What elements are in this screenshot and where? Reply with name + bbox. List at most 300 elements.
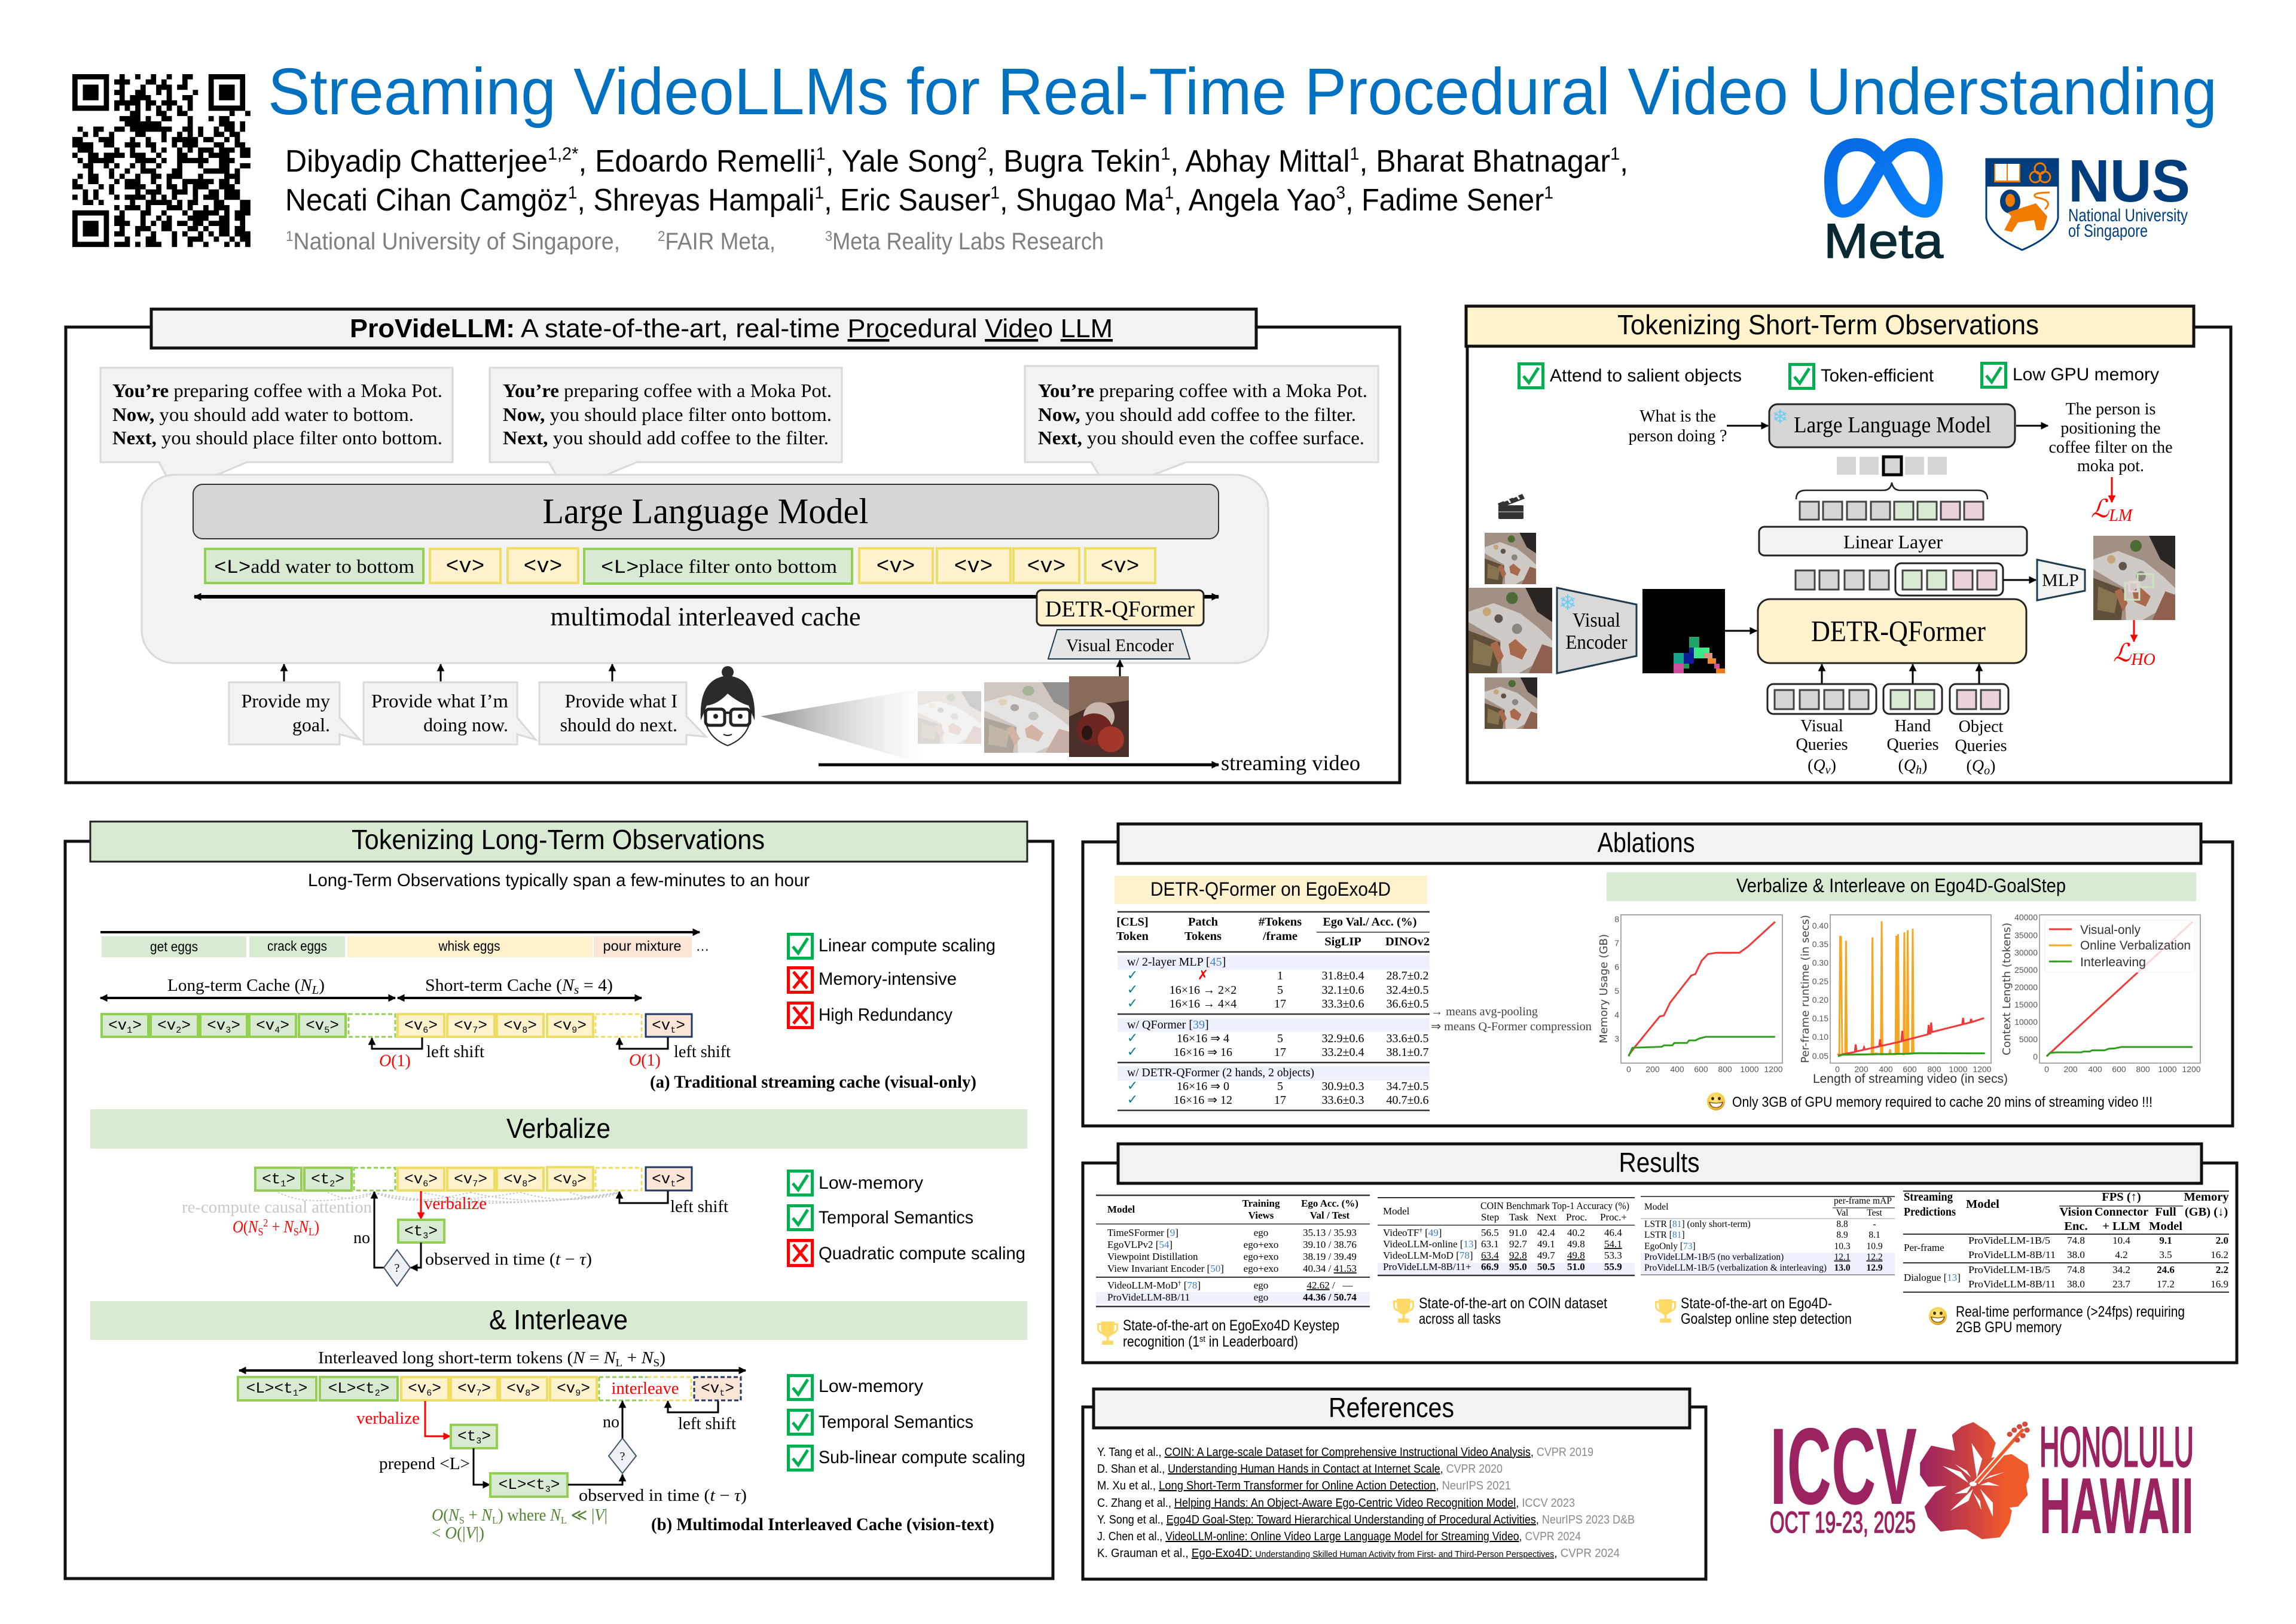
affiliations: 3 xyxy=(825,228,832,245)
visual-only token row: t xyxy=(670,1025,676,1036)
authors: 1 xyxy=(816,144,826,164)
interleaved token row: > xyxy=(581,1379,590,1397)
chart: context length: 0 xyxy=(2033,1052,2038,1061)
interleaved label and span: ) xyxy=(660,1349,665,1367)
table: streaming performance: 2.2 xyxy=(2216,1264,2228,1275)
complexity note: N xyxy=(549,1506,561,1525)
LLM output bubbles: You’re preparing coffee with a Moka Pot. xyxy=(1038,380,1367,401)
table: Ego4D Goalstep: LSTR [81] xyxy=(1644,1230,1685,1240)
interleaved token row: 8 xyxy=(525,1388,530,1399)
visual-only token row: > xyxy=(280,1016,289,1034)
authors: 1 xyxy=(815,183,824,203)
reference list xyxy=(1097,1446,1635,1560)
checklist verbalize: Low-memory xyxy=(819,1173,923,1193)
token cache row: <v> xyxy=(446,554,484,579)
callout: COIN xyxy=(1393,1295,1607,1327)
table: DETR-QFormer ablation: ✓ xyxy=(1127,996,1138,1011)
table: COIN: 51.0 xyxy=(1567,1261,1585,1272)
table: EgoExo4D: Views xyxy=(1248,1210,1274,1221)
table: DETR-QFormer ablation: w/ 2-layer MLP [45] xyxy=(1127,956,1226,969)
chart: context length: 35000 xyxy=(2014,930,2038,940)
affiliations: Meta Reality Labs Research xyxy=(832,228,1104,255)
query labels: Queries xyxy=(1796,735,1848,754)
table: DETR-QFormer ablation: 31.8±0.4 xyxy=(1322,969,1364,982)
table: streaming performance: Model xyxy=(2149,1220,2182,1233)
answer text: positioning the xyxy=(2060,419,2161,438)
LM loss: LM xyxy=(2108,506,2133,525)
table: streaming performance: 9.1 xyxy=(2159,1235,2172,1246)
chart: memory usage: 5 xyxy=(1614,986,1619,996)
chart: memory usage: 1000 xyxy=(1740,1064,1759,1074)
panel: Ablations xyxy=(1083,824,2233,1126)
authors: 1 xyxy=(1349,144,1359,164)
table notes: → means avg-pooling xyxy=(1431,1005,1538,1018)
interleaved token row: > xyxy=(530,1379,540,1397)
field-of-view cone xyxy=(761,688,924,764)
chart: per-frame runtime xyxy=(1799,915,1992,1074)
authors: , Angela Yao xyxy=(1174,183,1336,218)
table: COIN: 40.2 xyxy=(1567,1227,1585,1238)
token cache row xyxy=(205,548,1155,584)
chart: per-frame runtime: 0.30 xyxy=(1812,958,1828,967)
checklist (a) xyxy=(788,934,996,1027)
chart: memory usage: 3 xyxy=(1614,1034,1619,1043)
chart: memory usage: 6 xyxy=(1614,962,1619,972)
chart: memory usage: 400 xyxy=(1670,1064,1684,1074)
verbalize flow: L xyxy=(309,1226,315,1238)
benefit checks: Attend to salient objects xyxy=(1550,366,1742,386)
interleave flow: > xyxy=(551,1476,560,1494)
table: Ego4D Goalstep: 10.3 xyxy=(1834,1241,1851,1251)
table: streaming performance: Connector xyxy=(2095,1205,2148,1219)
query labels xyxy=(1796,717,2007,777)
chart: memory usage: 0 xyxy=(1626,1064,1631,1074)
interleaved token row: 2 xyxy=(375,1388,380,1399)
interleave flow: > xyxy=(481,1427,491,1445)
chart: memory usage: 800 xyxy=(1718,1064,1732,1074)
interleave flow xyxy=(356,1401,747,1505)
table: EgoExo4D: ego xyxy=(1254,1292,1268,1303)
table: COIN: † xyxy=(1419,1227,1422,1234)
visual-only token row: <v xyxy=(553,1016,572,1034)
table: DETR-QFormer ablation: 33.6±0.3 xyxy=(1322,1094,1364,1107)
table: COIN: 49] xyxy=(1428,1227,1442,1238)
chart: context length: 1200 xyxy=(2182,1064,2201,1074)
visual-only token row: <v xyxy=(306,1016,324,1034)
table: COIN: 54.1 xyxy=(1604,1238,1622,1250)
authors: , Eric Sauser xyxy=(824,183,990,218)
query labels: v xyxy=(1825,764,1831,777)
table: DETR-QFormer ablation: #Tokens xyxy=(1259,915,1302,929)
table: DETR-QFormer ablation: 5 xyxy=(1277,1080,1283,1093)
callout: EgoExo4D: recognition (1 xyxy=(1123,1333,1213,1350)
memory callout: Only 3GB of GPU memory required to cache 20 mins of streaming video !!! xyxy=(1732,1094,2152,1110)
table: DETR-QFormer ablation: Tokens xyxy=(1184,930,1222,943)
token cache row: <v> xyxy=(877,554,915,579)
query labels: (Q xyxy=(1808,756,1825,775)
interleaved token row: t xyxy=(719,1388,725,1399)
verbalize flow: 2 xyxy=(263,1217,268,1229)
chart: context length: 25000 xyxy=(2014,965,2038,975)
HO loss: ℒ xyxy=(2113,638,2131,667)
callout: EgoExo4D xyxy=(1097,1317,1339,1350)
NUS logo: of Singapore xyxy=(2068,221,2148,241)
Large Language Model box: Large Language Model xyxy=(543,492,868,531)
table: EgoExo4D: 38.19 / 39.49 xyxy=(1303,1251,1357,1262)
visual-only token row: > xyxy=(329,1016,339,1034)
table: EgoExo4D: Training xyxy=(1242,1198,1280,1209)
chart: per-frame runtime: 0.25 xyxy=(1812,976,1828,986)
chart: context length: Context Length (tokens) xyxy=(2001,923,2013,1055)
table: DETR-QFormer ablation: 32.9±0.6 xyxy=(1322,1032,1364,1045)
heading: ProVideLLM: ProVideLLM: A state-of-the-art, real-time Procedural Video LLM xyxy=(350,314,1113,343)
complexity note: S xyxy=(459,1515,465,1526)
answer text: moka pot. xyxy=(2077,457,2144,475)
band: Verbalize xyxy=(90,1109,1027,1149)
table: DETR-QFormer ablation: 17 xyxy=(1274,997,1286,1011)
interleaved label and span: + xyxy=(622,1349,642,1367)
visual-only token row: 9 xyxy=(572,1025,577,1036)
authors: , Shugao Ma xyxy=(1000,183,1165,218)
interleave flow: no xyxy=(603,1413,619,1431)
table: COIN: 50.5 xyxy=(1537,1261,1555,1272)
table: DETR-QFormer ablation: ✓ xyxy=(1127,1092,1138,1107)
table: streaming performance: Per-frame xyxy=(1904,1242,1944,1253)
table: COIN: [ xyxy=(1422,1227,1428,1238)
verbalize flow: no xyxy=(353,1229,370,1247)
query labels: Object xyxy=(1959,718,2004,736)
table: COIN: 63.1 xyxy=(1481,1238,1499,1250)
chart legend: Visual-only xyxy=(2080,923,2141,937)
checklist verbalize xyxy=(788,1171,1025,1265)
table: DETR-QFormer ablation: 33.3±0.6 xyxy=(1322,997,1364,1011)
brace xyxy=(1796,483,1987,499)
interleaved token row: <v xyxy=(506,1379,525,1397)
table: EgoExo4D xyxy=(1096,1195,1370,1306)
output frame with boxes xyxy=(2093,536,2175,620)
checklist verbalize: Temporal Semantics xyxy=(819,1208,973,1228)
chart: per-frame runtime: Per-frame runtime (in secs) xyxy=(1799,915,1812,1063)
interleaved token row: > xyxy=(725,1379,734,1397)
chart legend: Interleaving xyxy=(2080,956,2146,969)
cache label: multimodal interleaved cache xyxy=(550,602,861,631)
verbalize flow xyxy=(182,1191,728,1286)
table: DETR-QFormer ablation xyxy=(1116,912,1430,1110)
chart: context length: 15000 xyxy=(2014,1000,2038,1009)
table: streaming performance: 24.6 xyxy=(2157,1264,2175,1275)
table: streaming performance: ProVideLLM-8B/11 xyxy=(1968,1278,2056,1290)
title: Streaming VideoLLMs for Real-Time Procedural Video Understanding xyxy=(268,55,2217,129)
feature map xyxy=(1642,589,1725,673)
checklist interleave: Low-memory xyxy=(819,1376,923,1396)
chart: per-frame runtime: 0.05 xyxy=(1812,1051,1828,1061)
authors: 1 xyxy=(1544,183,1553,203)
table: COIN: 66.9 xyxy=(1481,1261,1499,1272)
table: EgoExo4D: 42.62 / — xyxy=(1307,1280,1353,1291)
visual-only token row: <v xyxy=(652,1016,670,1034)
LLM output bubbles: You’re preparing coffee with a Moka Pot. xyxy=(112,380,442,401)
query labels: Hand xyxy=(1895,717,1931,735)
interleaved label and span: S xyxy=(654,1357,660,1369)
table: DETR-QFormer ablation: 17 xyxy=(1274,1046,1286,1059)
verbalize token row: <v xyxy=(503,1170,522,1188)
table: EgoExo4D: 78] xyxy=(1187,1280,1201,1291)
authors: 1 xyxy=(990,183,1000,203)
affiliations: National University of Singapore, xyxy=(294,228,620,255)
checklist verbalize: Quadratic compute scaling xyxy=(819,1244,1025,1263)
complexity note: O(N xyxy=(432,1506,460,1525)
table: DETR-QFormer ablation: DINOv2 xyxy=(1385,935,1430,948)
table: Ego4D Goalstep: Test xyxy=(1867,1208,1882,1218)
table: COIN: Next xyxy=(1537,1211,1556,1223)
authors: Necati Cihan Camgöz xyxy=(285,183,588,218)
chart: memory usage: 4 xyxy=(1614,1010,1619,1019)
interleaved token row: <v xyxy=(701,1379,719,1397)
query labels: ) xyxy=(1990,757,1995,776)
verbalize flow: observed in time ( t − τ) xyxy=(425,1250,592,1269)
interleave flow: <t xyxy=(457,1427,476,1445)
visual-only token row: > xyxy=(527,1016,537,1034)
timeline arrow xyxy=(100,931,700,933)
table: streaming performance: FPS (↑) xyxy=(2102,1190,2141,1204)
table: streaming performance: Dialogue [13] xyxy=(1904,1272,1961,1283)
table: EgoExo4D: EgoVLPv2 [54] xyxy=(1107,1239,1173,1250)
visual-only token row: 1 xyxy=(127,1025,132,1036)
question text: What is the xyxy=(1639,407,1716,426)
reference list: Y. Tang et al., COIN: A Large-scale Dataset for Comprehensive Instructional Video Analysis, CVPR 2019 xyxy=(1097,1446,1593,1459)
table: Ego4D Goalstep: 12.1 xyxy=(1834,1252,1851,1262)
table: COIN: Proc. xyxy=(1566,1211,1587,1223)
table: COIN: COIN Benchmark Top-1 Accuracy (%) xyxy=(1480,1200,1629,1211)
re-compute arcs xyxy=(278,1192,619,1203)
table: EgoExo4D: 35.13 / 35.93 xyxy=(1303,1227,1357,1238)
interleaved token row: 7 xyxy=(476,1388,481,1399)
callout: Ego4D: State-of-the-art on Ego4D- xyxy=(1681,1295,1832,1312)
token cache row: <v> xyxy=(954,554,993,579)
Large Language Model block: ❄ xyxy=(1772,405,1788,428)
Visual Encoder trapezoid xyxy=(1557,588,1636,673)
table: DETR-QFormer ablation: 32.4±0.5 xyxy=(1387,984,1428,997)
chart: memory usage: 7 xyxy=(1614,938,1619,948)
table: EgoExo4D: ego+exo xyxy=(1244,1251,1278,1262)
interleaved token row: <L><t xyxy=(246,1379,293,1397)
LLM output bubbles: Next, you should add coffee to the filter. xyxy=(503,427,829,448)
callout: Ego4D xyxy=(1655,1295,1852,1327)
authors: , Bugra Tekin xyxy=(987,144,1161,179)
table: Ego4D Goalstep: 12.2 xyxy=(1866,1252,1883,1262)
table: Ego4D Goalstep: ProVideLLM-1B/5 (no verbalization) xyxy=(1644,1252,1784,1262)
verbalize token row: > xyxy=(428,1170,438,1188)
chart: context length: 600 xyxy=(2112,1064,2126,1074)
verbalize flow: + xyxy=(268,1218,283,1237)
callout: EgoExo4D: State-of-the-art on EgoExo4D Keystep xyxy=(1123,1317,1339,1334)
interleaved token row: 6 xyxy=(426,1388,432,1399)
table: DETR-QFormer ablation: 33.2±0.4 xyxy=(1322,1046,1364,1059)
visual-only token row xyxy=(102,1014,692,1037)
table: Ego4D Goalstep: Model xyxy=(1644,1202,1668,1212)
LLM output bubbles: You’re preparing coffee with a Moka Pot. xyxy=(503,380,832,401)
chart: per-frame runtime: 0.40 xyxy=(1812,921,1828,930)
checklist (a): High Redundancy xyxy=(819,1005,952,1025)
panel: References xyxy=(1083,1389,1706,1579)
verbalize flow: re-compute causal attention xyxy=(182,1198,372,1217)
callout: EgoExo4D: in Leaderboard) xyxy=(1205,1333,1298,1350)
table: DETR-QFormer ablation: w/ QFormer [39] xyxy=(1127,1018,1209,1031)
verbalize token row: > xyxy=(577,1170,587,1188)
chart: per-frame runtime: 400 xyxy=(1879,1064,1893,1074)
LLM output bubbles xyxy=(100,366,1378,481)
chart: per-frame runtime: 1200 xyxy=(1973,1064,1992,1074)
Large Language Model block xyxy=(1769,404,2015,447)
complexity note: N xyxy=(481,1506,493,1525)
heading: ProVideLLM xyxy=(151,309,1256,348)
table: COIN: 92.8 xyxy=(1509,1250,1527,1261)
authors: 1,2* xyxy=(548,144,579,164)
interleave flow: observed in time ( t − τ) xyxy=(579,1486,747,1505)
table: streaming performance xyxy=(1903,1190,2229,1292)
query labels: Queries xyxy=(1955,737,2007,755)
table: streaming performance: Model xyxy=(1966,1198,1999,1211)
query labels: o xyxy=(1984,764,1990,777)
verbalize flow: S xyxy=(258,1226,263,1238)
table: DETR-QFormer ablation: ✗ xyxy=(1198,968,1208,983)
LLM output bubbles: Now, you should place filter onto bottom. xyxy=(503,404,832,425)
authors: , Fadime Sener xyxy=(1345,183,1544,218)
table: EgoExo4D: [ xyxy=(1181,1280,1187,1291)
visual-only token row: 8 xyxy=(522,1025,527,1036)
interleave flow: ? xyxy=(620,1450,625,1463)
verbalize flow: > xyxy=(428,1222,438,1240)
visual-only token row: <v xyxy=(503,1016,522,1034)
query token boxes xyxy=(1767,684,2008,714)
table: streaming performance: 23.7 xyxy=(2112,1278,2130,1290)
table: EgoExo4D: TimeSFormer [9] xyxy=(1107,1227,1178,1238)
cache labels: Short-term Cache ( N xyxy=(425,976,573,995)
chart legend: Online Verbalization xyxy=(2080,939,2191,953)
LLM output bubbles: Next, you should place filter onto bottom. xyxy=(112,427,442,448)
prompt bubbles: Provide my xyxy=(242,690,330,712)
visual-only token row: > xyxy=(577,1016,587,1034)
visual-only token row: > xyxy=(428,1016,438,1034)
prompt bubbles: Provide what I’m xyxy=(371,690,508,712)
chart legend xyxy=(2045,920,2195,972)
Visual Encoder trapezoid: ❄ xyxy=(1559,591,1577,615)
table: streaming performance: Full xyxy=(2155,1205,2176,1219)
interleaved token row xyxy=(238,1377,741,1400)
checklist interleave: Sub-linear compute scaling xyxy=(819,1448,1025,1467)
authors: 2 xyxy=(977,144,987,164)
cache labels: = 4) xyxy=(579,976,613,995)
table: Ego4D Goalstep: 10.9 xyxy=(1866,1241,1883,1251)
verbalize token row: > xyxy=(286,1170,295,1188)
table: DETR-QFormer ablation: Token xyxy=(1116,930,1149,943)
authors: , Shreyas Hampali xyxy=(577,183,815,218)
chart: memory usage: 200 xyxy=(1645,1064,1660,1074)
prompt bubbles: should do next. xyxy=(560,714,677,735)
visual-only token row: > xyxy=(676,1016,685,1034)
selected token strip xyxy=(1837,457,1947,475)
interleaved token row: <L><t xyxy=(328,1379,375,1397)
left-shift connectors: O(1) xyxy=(379,1052,411,1070)
table: streaming performance: Streaming xyxy=(1904,1190,1953,1204)
table notes: ⇒ means Q-Former compression xyxy=(1431,1020,1592,1033)
token cache row: <v> xyxy=(1027,554,1065,579)
prompt bubbles xyxy=(229,682,706,744)
icon: hibiscus flower xyxy=(1921,1421,2030,1538)
table: COIN: 49.8 xyxy=(1567,1238,1585,1250)
interleaved token row: <v xyxy=(457,1379,476,1397)
Meta logo xyxy=(1824,145,1943,268)
table: COIN: VideoLLM-MoD [78] xyxy=(1383,1250,1473,1261)
table: streaming performance: 3.5 xyxy=(2159,1249,2172,1260)
interleave flow: prepend <L> xyxy=(379,1455,470,1473)
table: EgoExo4D: ego xyxy=(1254,1280,1268,1291)
visual-only token row: <v xyxy=(108,1016,127,1034)
interleaved token row: 9 xyxy=(575,1388,581,1399)
interleaved token row: <v xyxy=(408,1379,426,1397)
callout: EgoExo4D: st xyxy=(1199,1334,1206,1344)
interleaved token row: > xyxy=(432,1379,441,1397)
table: streaming performance: Memory xyxy=(2184,1190,2229,1204)
activity bars: get eggs xyxy=(150,939,198,954)
arrow: question to LLM xyxy=(1727,425,1768,427)
verbalize token row: <t xyxy=(311,1170,329,1188)
chart: per-frame runtime: 1000 xyxy=(1949,1064,1968,1074)
chart: context length: 40000 xyxy=(2014,912,2038,922)
Visual Encoder trapezoid: Encoder xyxy=(1565,631,1628,654)
chart: memory usage xyxy=(1598,914,1783,1074)
table: DETR-QFormer ablation: ✓ xyxy=(1127,1045,1138,1060)
visual-only token row: <v xyxy=(207,1016,225,1034)
heading xyxy=(1094,1389,1690,1428)
table: streaming performance: ProVideLLM-8B/11 xyxy=(1968,1249,2056,1260)
table: DETR-QFormer ablation: 28.7±0.2 xyxy=(1387,969,1428,982)
NUS logo: National University xyxy=(2068,206,2188,225)
band: Verbalize: Verbalize xyxy=(506,1113,610,1144)
chart: context length: 400 xyxy=(2088,1064,2102,1074)
MLP block: MLP xyxy=(2042,570,2079,590)
table: DETR-QFormer ablation: [CLS] xyxy=(1116,915,1149,929)
token cache row: <L>place filter onto bottom xyxy=(601,555,837,579)
checklist (a): Linear compute scaling xyxy=(819,936,996,956)
table: DETR-QFormer ablation: 32.1±0.6 xyxy=(1322,984,1364,997)
panel: Results xyxy=(1083,1144,2237,1363)
benefit checks xyxy=(1519,364,2159,389)
verbalize token row: 2 xyxy=(329,1179,335,1189)
MLP block xyxy=(2037,560,2085,600)
reference list: D. Shan et al., Understanding Human Hands in Contact at Internet Scale, CVPR 2020 xyxy=(1097,1463,1503,1476)
callout: real-time: 2GB GPU memory xyxy=(1956,1319,2062,1336)
cache labels xyxy=(100,976,642,998)
chart: per-frame runtime: 800 xyxy=(1927,1064,1941,1074)
heading: Ablations xyxy=(1598,827,1694,858)
input video frames xyxy=(1468,533,1552,729)
query labels: Visual xyxy=(1800,717,1843,735)
complexity note: < O(|V|) xyxy=(432,1524,484,1543)
table: COIN: VideoTF xyxy=(1383,1227,1419,1238)
caption (a): (a) Traditional streaming cache (visual-only) xyxy=(650,1072,976,1092)
heading: Tokenizing Long-Term Observations xyxy=(352,824,765,855)
table: DETR-QFormer ablation: Ego Val./ Acc. (%) xyxy=(1323,915,1417,929)
complexity note: ≪ | xyxy=(567,1506,594,1525)
Visual Encoder trapezoid: Visual xyxy=(1573,609,1620,631)
verbalize token row: 1 xyxy=(280,1179,286,1189)
verbalize flow: left shift xyxy=(670,1198,728,1216)
callout: real-time: Real-time performance (>24fps) requiring xyxy=(1956,1304,2185,1320)
verbalize flow: 3 xyxy=(423,1231,428,1241)
table: COIN: VideoLLM-online [13] xyxy=(1383,1238,1477,1250)
cache labels: Long-term Cache ( N xyxy=(167,976,312,995)
